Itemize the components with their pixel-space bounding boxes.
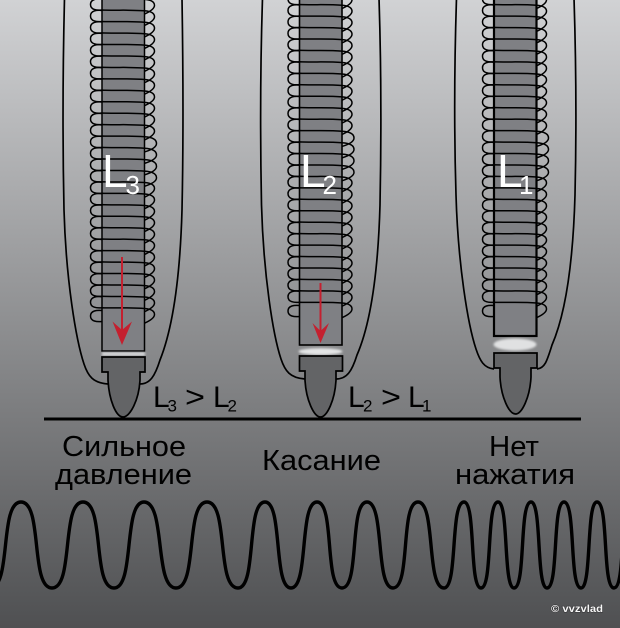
spring coil <box>90 0 156 323</box>
panel: strong pressure pen <box>55 0 237 491</box>
formula L3 > L2 <box>153 381 237 416</box>
panel: touch pen <box>261 0 431 477</box>
formula L2 > L1: L <box>348 381 365 414</box>
pen housing <box>455 0 576 369</box>
caption: no pressure <box>455 431 575 491</box>
caption: no pressure: нажатия <box>455 459 575 491</box>
rod <box>102 0 144 351</box>
label L2 <box>300 145 337 200</box>
formula L3 > L2: L <box>153 381 170 414</box>
label L3 <box>102 145 140 200</box>
formula L3 > L2: 2 <box>228 396 237 416</box>
label L1: L <box>497 145 523 197</box>
pen tip <box>494 353 537 414</box>
label L2: 2 <box>322 170 337 200</box>
caption: strong pressure <box>55 431 192 491</box>
pen tip <box>102 357 145 417</box>
spring coil <box>482 0 548 318</box>
formula L2 > L1: L <box>408 381 425 414</box>
label L2: L <box>300 145 326 197</box>
red arrow <box>312 283 329 343</box>
output frequency wave <box>0 502 620 588</box>
caption: touch: Касание <box>262 445 381 477</box>
formula L3 > L2: L <box>213 381 230 414</box>
pen housing <box>63 0 183 384</box>
label L1: 1 <box>519 170 533 200</box>
formula L2 > L1 <box>348 381 431 416</box>
caption: no pressure: Нет <box>489 431 539 463</box>
spring coil <box>288 0 354 318</box>
red arrow <box>112 257 132 345</box>
pen housing <box>261 0 381 379</box>
formula L2 > L1: 1 <box>422 396 431 416</box>
gap highlight <box>494 338 536 350</box>
label L3: L <box>102 145 128 197</box>
label L1 <box>497 145 533 200</box>
formula L3 > L2: > <box>185 381 205 414</box>
rod <box>300 0 342 345</box>
panel: no pressure pen <box>455 0 576 491</box>
rod <box>494 0 536 336</box>
copyright: © vvzvlad <box>551 604 603 615</box>
caption: strong pressure: давление <box>55 459 192 491</box>
caption: strong pressure: Сильное <box>62 431 186 463</box>
ground line <box>44 418 581 420</box>
label L3: 3 <box>126 170 140 200</box>
pen tip <box>300 356 342 417</box>
gap highlight <box>102 353 145 355</box>
formula L3 > L2: 3 <box>168 396 177 416</box>
gap highlight <box>298 348 342 355</box>
formula L2 > L1: 2 <box>363 396 372 416</box>
formula L2 > L1: > <box>381 381 401 414</box>
